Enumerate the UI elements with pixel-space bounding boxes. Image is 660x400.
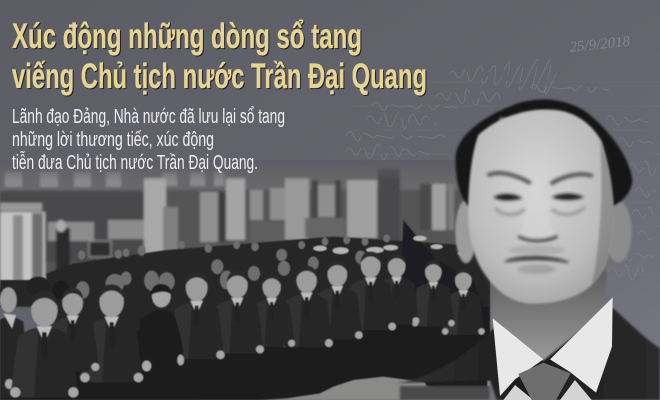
facial features: [487, 173, 593, 274]
floor: [200, 345, 490, 400]
face edge shadow: [592, 140, 614, 285]
intro text: Lãnh đạo Đảng, Nhà nước đã lưu lại sổ tang: [12, 105, 285, 128]
legs of the mourners standing on the floor: [0, 307, 490, 400]
woman in dark dress: [139, 284, 185, 400]
face: [468, 109, 613, 304]
front row mourners: [0, 251, 419, 400]
bottom band behind portrait: [400, 386, 490, 400]
portrait: [390, 100, 660, 400]
intro text: những lời thương tiếc, xúc động: [12, 128, 214, 151]
far right mourners: [442, 268, 485, 335]
title: [12, 17, 427, 96]
title: Xúc động những dòng sổ tang: [12, 17, 362, 56]
hair: [456, 100, 632, 207]
title: viếng Chủ tịch nước Trần Đại Quang: [12, 57, 427, 96]
jacket: [390, 308, 660, 400]
intro text: [12, 105, 285, 174]
intro text: tiễn đưa Chủ tịch nước Trần Đại Quang.: [12, 151, 258, 174]
shirt collar: [493, 297, 613, 400]
top fade of hall: [0, 160, 490, 182]
condolence book handwriting: [345, 34, 660, 322]
mourner at left edge: [0, 287, 30, 398]
hall background photo: [0, 168, 490, 308]
necktie: [518, 363, 571, 400]
ears: [455, 200, 632, 263]
neck: [492, 270, 607, 361]
back rows of mourners: [0, 220, 490, 397]
crowd photo: [0, 220, 490, 400]
condolence book handwriting: 25/9/2018: [569, 34, 631, 56]
